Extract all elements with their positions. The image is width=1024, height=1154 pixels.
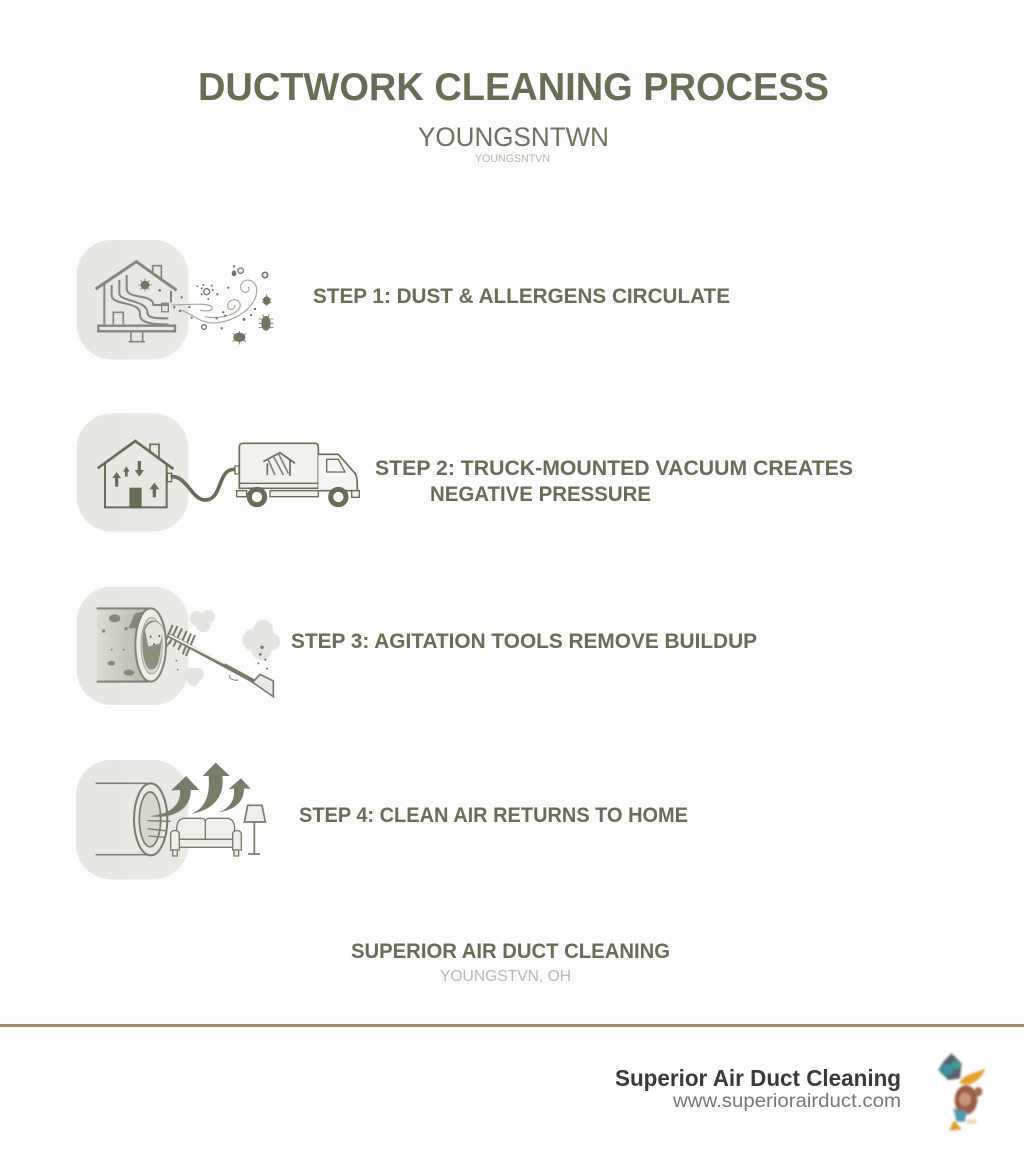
arrows [149,763,251,817]
footer brand name: Superior Air Duct Cleaning [615,1065,901,1091]
lamp [244,805,265,854]
step 2 label: STEP 2: TRUCK-MOUNTED VACUUM CREATES [375,457,853,480]
step 1 label: STEP 1: DUST & ALLERGENS CIRCULATE [313,285,730,308]
title: DUCTWORK CLEANING PROCESS [198,66,829,109]
house door and arrows [112,461,159,507]
footer url: www.superiorairduct.com [672,1091,901,1112]
footer divider [0,1024,1024,1027]
step 3 label: STEP 3: AGITATION TOOLS REMOVE BUILDUP [291,630,757,653]
step 1 icon [77,240,273,359]
dust clouds [184,610,280,686]
subtitle: YOUNGSNTWN [418,122,609,152]
small subtitle: YOUNGSNTVN [475,153,550,165]
step 4 label: STEP 4: CLEAN AIR RETURNS TO HOME [299,804,688,827]
step 2 label [375,457,853,506]
brush [166,625,253,681]
step 2 label: NEGATIVE PRESSURE [430,483,651,506]
step 4 icon [76,760,265,879]
company name: SUPERIOR AIR DUCT CLEANING [351,940,670,963]
step 2 icon [77,413,359,532]
mascot [938,1053,985,1131]
location: YOUNGSTVN, OH [440,968,571,985]
sofa [171,818,241,856]
airflow lines [147,821,171,837]
step 3 icon [77,587,280,705]
